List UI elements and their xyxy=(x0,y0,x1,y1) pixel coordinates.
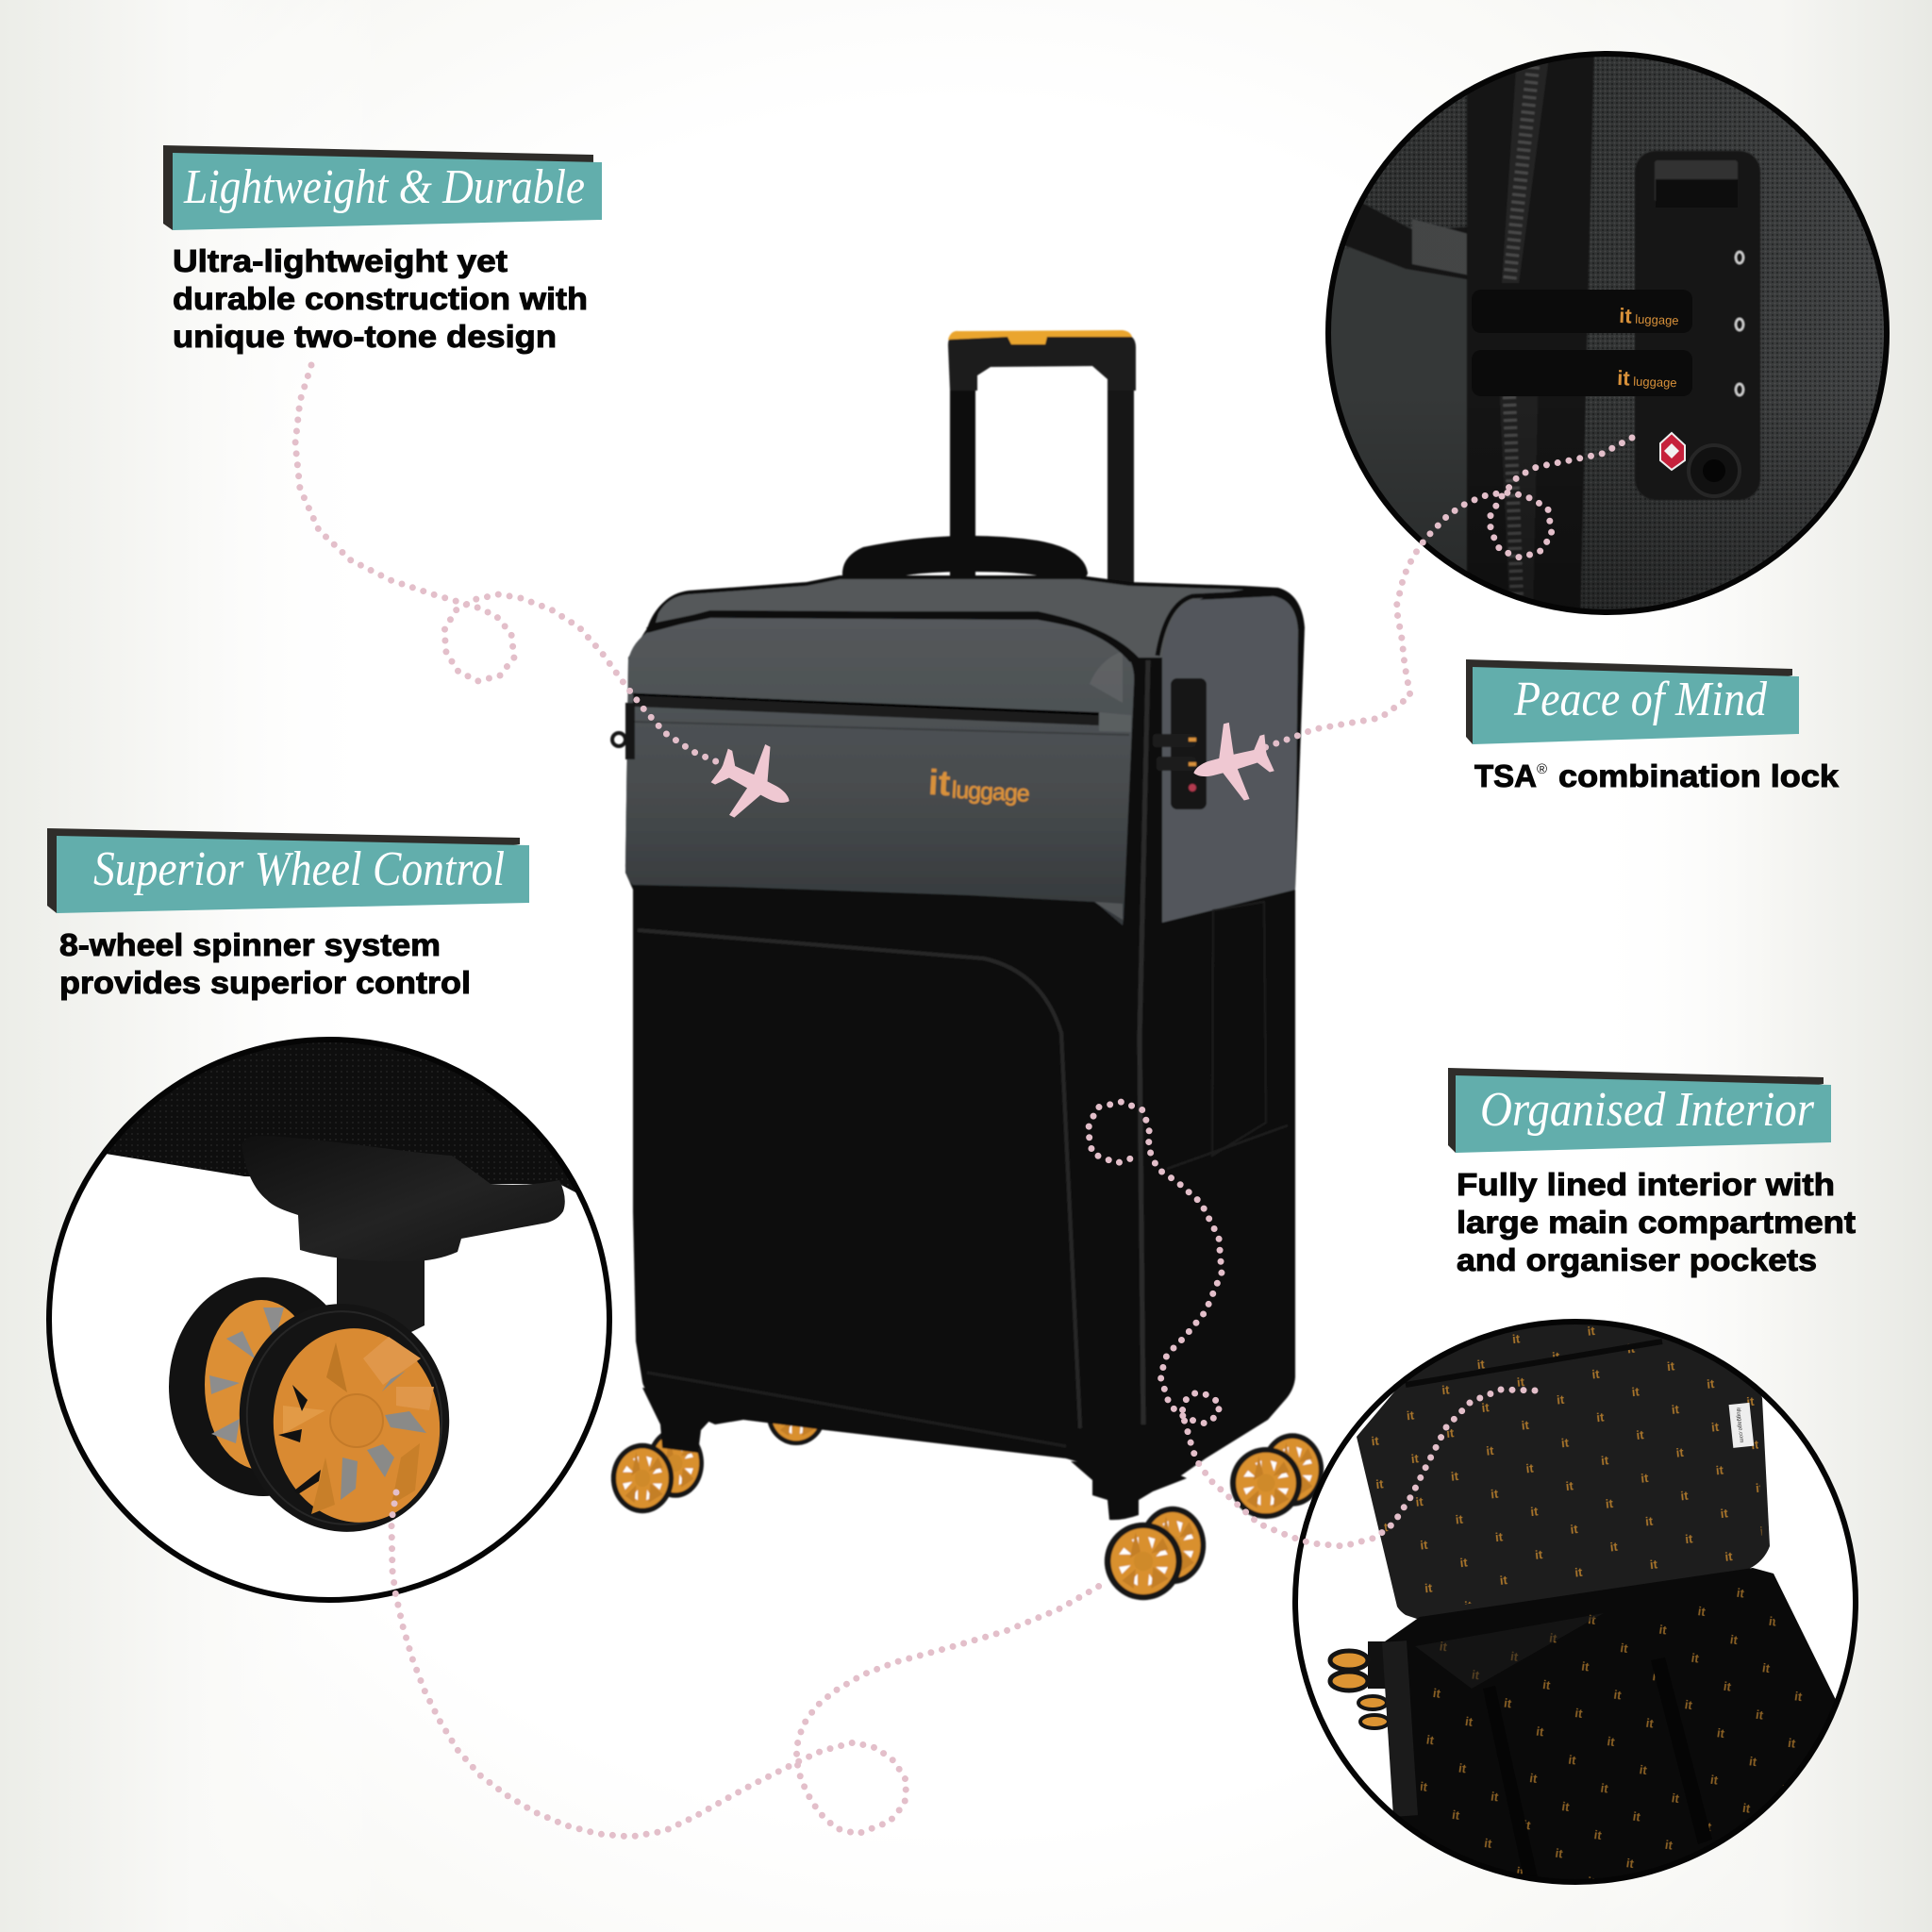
dotted route: wheel to suitcase wheel xyxy=(391,1492,1108,1837)
small wheels xyxy=(1330,1641,1396,1728)
text block: interior description xyxy=(1457,1167,1856,1277)
text block: lock description: combination lock xyxy=(1558,758,1840,793)
lock body xyxy=(1635,151,1760,500)
front left wheel xyxy=(611,1388,714,1513)
telescopic handle xyxy=(948,330,1136,587)
side piping xyxy=(1158,592,1302,656)
grey top lid xyxy=(656,579,1244,658)
heading: Organised Interior xyxy=(1448,1068,1831,1153)
zip tags xyxy=(1472,290,1692,396)
text block: lock description: ® xyxy=(1537,761,1547,777)
label xyxy=(1729,1403,1754,1448)
left zipper pull xyxy=(612,703,635,759)
text block: lightweight description: unique two-tone design xyxy=(173,319,557,354)
heading: Superior Wheel Control xyxy=(47,828,529,913)
open lid xyxy=(1357,1311,1770,1620)
fabric xyxy=(107,1042,575,1192)
zipper band xyxy=(1467,47,1594,623)
front big wheel xyxy=(240,1304,449,1532)
text block: wheel description: provides superior control xyxy=(59,965,471,1000)
text block: wheel description: 8-wheel spinner system xyxy=(59,927,441,962)
front panel folds xyxy=(1090,651,1123,920)
dotted route: body to interior xyxy=(1088,1102,1535,1546)
caster bracket xyxy=(242,1136,565,1261)
body silhouette xyxy=(625,575,1305,1485)
top zipper piping xyxy=(647,613,1132,660)
grey front panel xyxy=(625,618,1134,925)
lower front pocket zipper xyxy=(638,930,1080,1428)
zip tags: it luggage xyxy=(1617,366,1677,391)
text block: lightweight description xyxy=(173,243,588,354)
lock detail circle xyxy=(1321,47,1896,623)
heading: Organised Interior: Organised Interior xyxy=(1480,1083,1815,1137)
caster stem xyxy=(337,1257,425,1332)
main zipper line xyxy=(1140,660,1148,1424)
label: itluggage.com xyxy=(1735,1407,1744,1443)
logo xyxy=(927,763,1031,808)
TSA diamond icon xyxy=(1660,433,1685,470)
main zipper band xyxy=(1106,658,1160,1443)
text block: interior description: Fully lined interior with xyxy=(1457,1167,1835,1202)
icon: left plane xyxy=(702,730,808,837)
text block: interior description: large main compartment xyxy=(1457,1205,1856,1240)
lower pocket seam xyxy=(647,1373,1066,1446)
heading: Lightweight & Durable: Lightweight & Durable xyxy=(183,160,585,214)
text block: interior description: and organiser pockets xyxy=(1457,1242,1817,1277)
grey side panel xyxy=(1162,596,1298,923)
text block: wheel description xyxy=(59,927,471,1000)
bottom shading xyxy=(1370,440,1860,609)
rear middle wheel xyxy=(767,1385,825,1445)
suitcase xyxy=(611,330,1324,1600)
text block: lightweight description: Ultra-lightweight yet xyxy=(173,243,508,278)
heading: Superior Wheel Control: Superior Wheel Control xyxy=(93,842,505,896)
open base xyxy=(1385,1568,1849,1887)
zip tags: it luggage xyxy=(1619,304,1679,329)
wheel detail circle xyxy=(38,1028,623,1600)
interior detail circle xyxy=(1295,1311,1856,1887)
upper pocket zipper xyxy=(633,694,1131,735)
dotted route: lightweight to plane xyxy=(295,365,724,765)
side seam xyxy=(1167,1125,1288,1169)
rear big wheel xyxy=(169,1277,326,1496)
text block: lock description: TSA xyxy=(1474,758,1537,793)
heading: Lightweight & Durable xyxy=(163,145,602,230)
icon: right plane xyxy=(1183,714,1279,811)
rear right wheel xyxy=(1230,1433,1324,1519)
logo: it xyxy=(927,763,952,804)
side lock xyxy=(1153,678,1207,809)
dotted route: lock to plane xyxy=(1263,438,1632,748)
heading: Peace of Mind xyxy=(1466,659,1799,744)
text block: lightweight description: durable construction with xyxy=(173,281,588,316)
side handle xyxy=(1212,902,1266,1156)
carry handle xyxy=(842,536,1088,584)
heading: Peace of Mind: Peace of Mind xyxy=(1513,673,1768,726)
pocket xyxy=(1331,204,1468,571)
logo: luggage xyxy=(951,776,1030,808)
front right wheel xyxy=(1071,1461,1206,1600)
keyhole xyxy=(1689,445,1740,496)
